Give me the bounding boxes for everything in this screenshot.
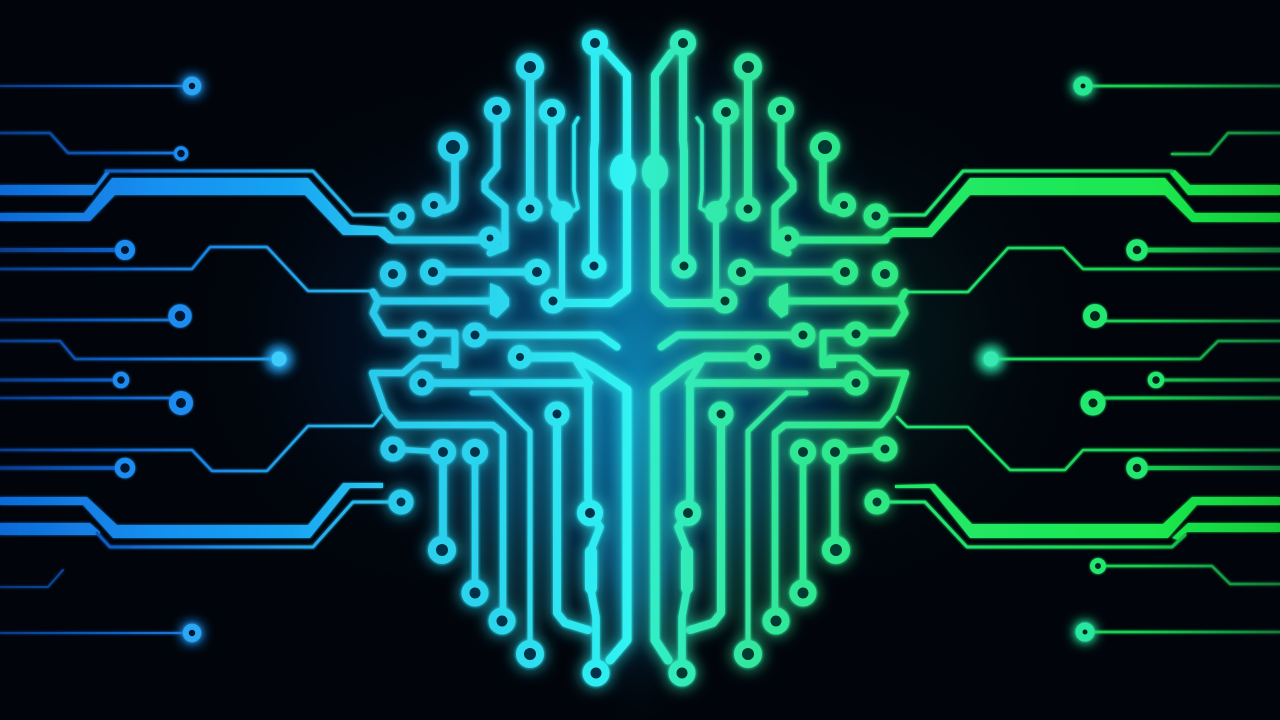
short fading trace [0,570,63,587]
left circuit traces (blue) [0,77,394,642]
node line 403 [1084,394,1280,412]
upper thick bus [880,170,1280,243]
glowing node line 359 [0,341,290,370]
bottom node line [0,624,201,642]
nodes [384,34,606,682]
glowing node line 359 [980,341,1280,370]
top node line [1074,77,1280,95]
node line 316 [0,308,188,324]
trace: top node line [0,77,201,95]
center pad [610,154,636,190]
upper traces [655,50,886,303]
trace: lower stepped line [0,415,382,471]
trace: small node line [0,133,186,159]
trace: lower thick bus [0,483,392,547]
trace: upper thick bus [0,170,394,243]
node line 380 [0,374,127,386]
node line 380 [1150,374,1280,386]
arrow [373,283,509,318]
upper stepped line [902,248,1280,292]
node line 250 [0,243,132,257]
lower stepped line [897,417,1280,470]
node line 468 [0,460,132,476]
node line 403 [0,394,190,412]
nodes [672,34,894,682]
node line 316 [1086,308,1280,324]
brain: left hemisphere [372,34,636,682]
center pad [642,154,668,190]
arrow [769,283,905,318]
upper traces [392,50,627,303]
node line 468 [1130,460,1280,476]
trace: upper stepped line [0,247,373,291]
bracket traces [372,301,627,672]
bracket traces [655,301,906,672]
fading stepped trace [1172,133,1280,154]
brain: right hemisphere (mirrored) [642,34,906,682]
small node stepped line [1092,560,1280,584]
lower thick bus [888,484,1280,547]
bottom node line [1076,623,1280,641]
right circuit traces (green) [880,77,1280,641]
node line 250 [1130,242,1280,258]
